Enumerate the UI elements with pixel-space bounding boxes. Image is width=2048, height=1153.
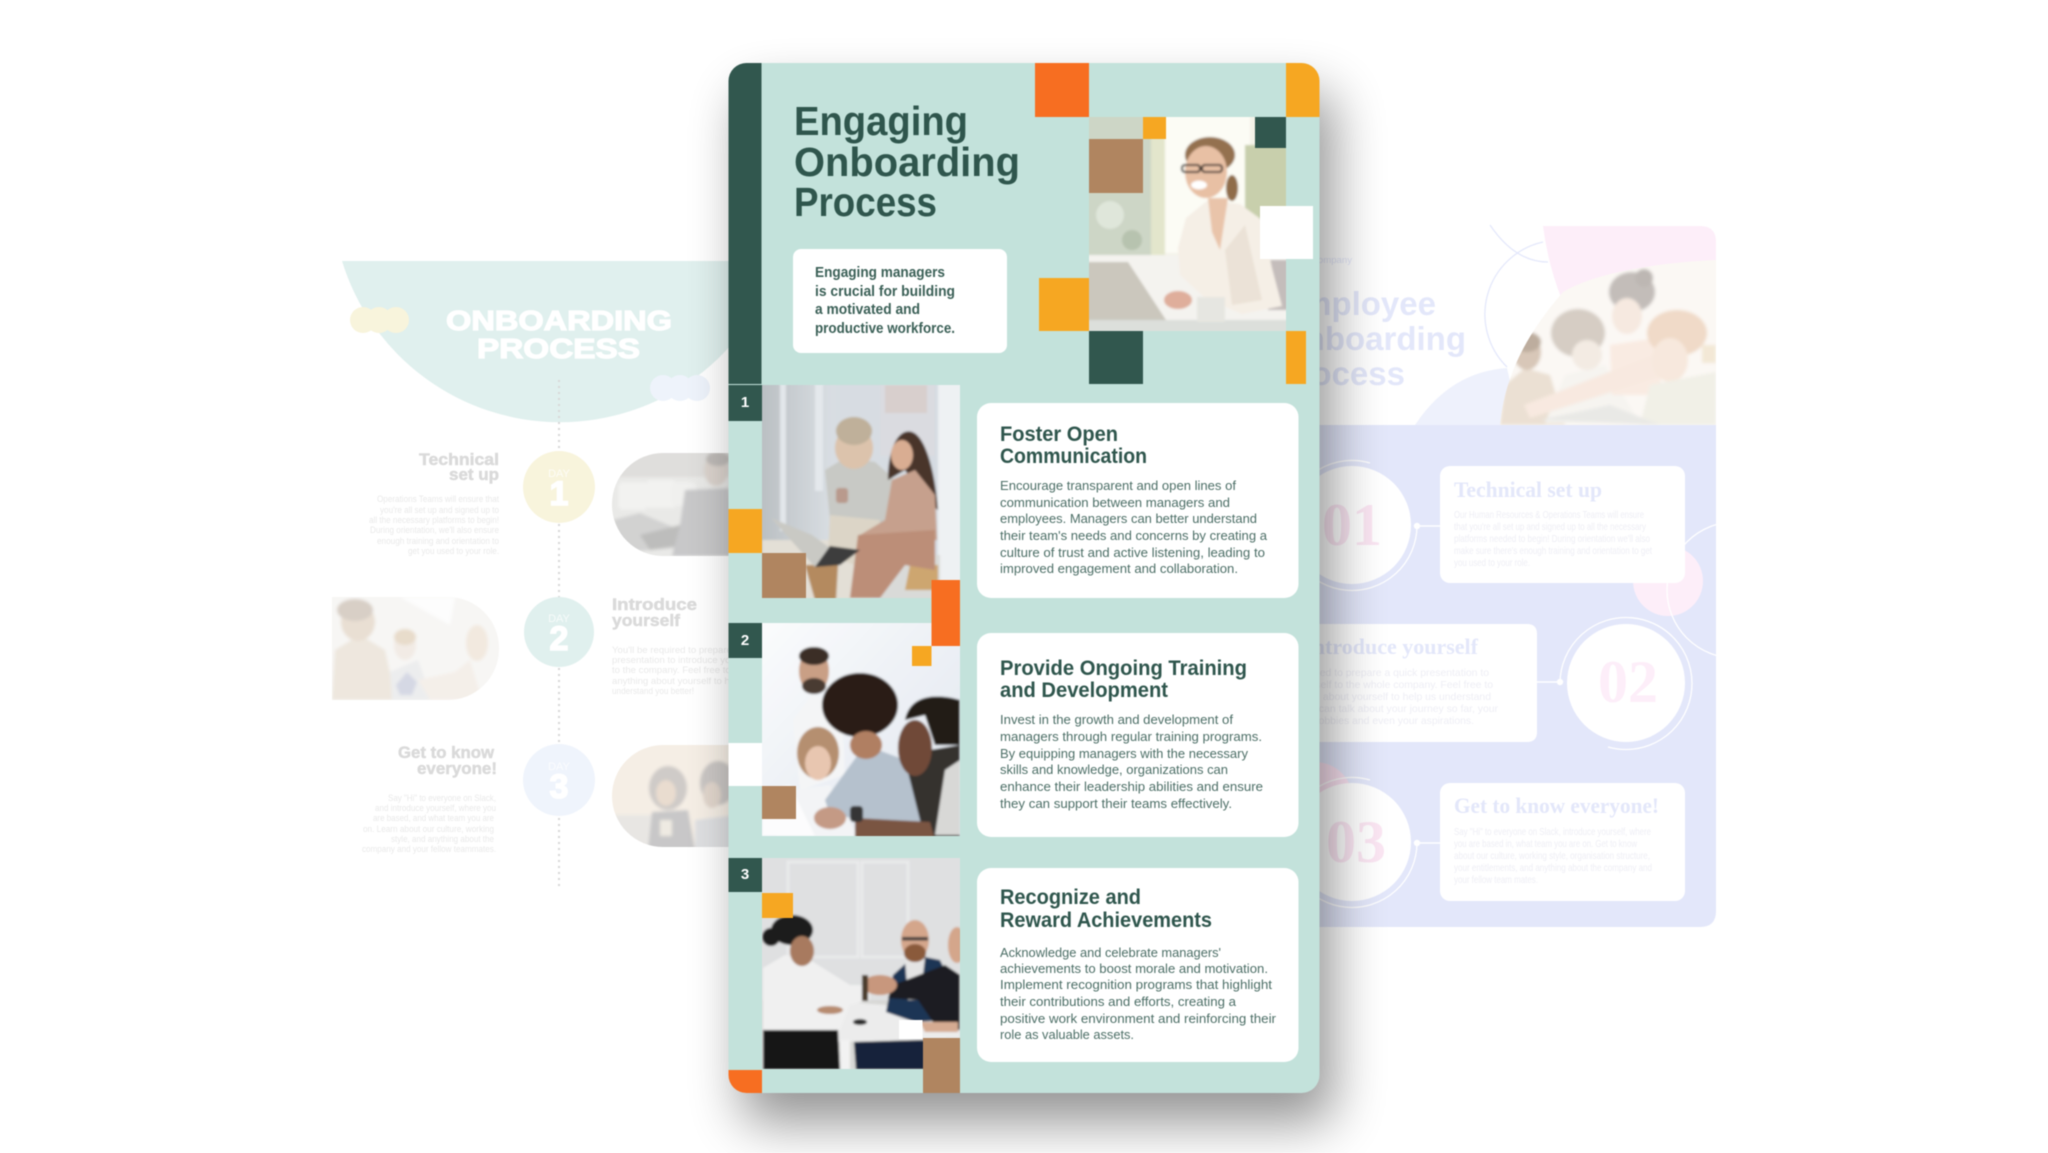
number badge 3: 3 xyxy=(741,866,749,883)
body 1: improved engagement and collaboration. xyxy=(1000,561,1238,576)
step 2 text: to the company. Feel free to tell us xyxy=(612,665,759,676)
card 02: Introduce yourself xyxy=(1304,634,1479,659)
pink circle accent xyxy=(1633,546,1703,616)
card 02: introduce yourself to the whole company. Feel free to xyxy=(1249,680,1493,691)
step 1 text: set up xyxy=(449,466,499,484)
content card 2 xyxy=(977,633,1298,837)
step 3 text: and introduce yourself, where you xyxy=(375,803,496,814)
body 2: they can support their teams effectively. xyxy=(1000,796,1232,811)
step 2 text xyxy=(612,596,765,697)
body 2: skills and knowledge, organizations can xyxy=(1000,762,1228,777)
step 3 text: Get to know xyxy=(398,744,494,762)
card 01: Our Human Resources & Operations Teams will ensure xyxy=(1454,510,1644,521)
photo: colleagues around a computer xyxy=(758,619,964,840)
step 1 text: During orientation, we'll also ensure xyxy=(370,525,499,536)
step 2 text: Introduce xyxy=(612,596,697,614)
step 2 text: understand you better! xyxy=(612,686,694,697)
day 3 badge: DAY xyxy=(548,761,571,773)
body 3: Implement recognition programs that highlight xyxy=(1000,977,1272,992)
circle 03 xyxy=(1293,783,1411,901)
heading 1 xyxy=(1000,426,1147,464)
number badge 3 xyxy=(728,858,762,892)
heading 1: Communication xyxy=(1000,445,1147,468)
card 03: about our culture, working style, organisation structure, xyxy=(1454,851,1650,862)
card 03: Say "Hi" to everyone on Slack, introduce yourself, where xyxy=(1454,827,1651,838)
light lavender hill xyxy=(1415,368,1520,425)
body 1 xyxy=(1000,478,1268,576)
step 01: 01 xyxy=(1322,492,1382,558)
card 01: platforms needed to begin! During orientation we'll also xyxy=(1454,534,1650,545)
photo: man on sofa xyxy=(612,452,729,556)
card 02: tell us anything about yourself to help us understand xyxy=(1251,692,1491,703)
body 1: Encourage transparent and open lines of xyxy=(1000,478,1236,493)
number badge 1: 1 xyxy=(741,394,749,411)
heading 3: Reward Achievements xyxy=(1000,909,1212,932)
card 03: your entitlements, and anything about the company and xyxy=(1454,863,1652,874)
card background xyxy=(728,63,1320,1093)
day 2 badge: 2 xyxy=(550,620,568,658)
day 1 badge xyxy=(523,451,595,523)
body 1: their team's needs and concerns by creating a xyxy=(1000,528,1268,543)
step 01 xyxy=(1287,460,1685,590)
day 3 badge xyxy=(523,744,595,816)
left title: PROCESS xyxy=(477,333,640,364)
card 01: make sure there's enough training and orientation to get xyxy=(1454,546,1652,557)
body 2: enhance their leadership abilities and ensure xyxy=(1000,779,1263,794)
card 03: your fellow team mates. xyxy=(1454,875,1538,886)
day 2 badge xyxy=(524,597,594,667)
body 2: Invest in the growth and development of xyxy=(1000,712,1233,727)
body 2: By equipping managers with the necessary xyxy=(1000,746,1248,761)
day 1 badge: DAY xyxy=(548,468,571,480)
body 1: employees. Managers can better understand xyxy=(1000,511,1257,526)
day 2 badge: DAY xyxy=(548,613,571,625)
lavender panel xyxy=(1280,425,1716,927)
photo: smiling businesswoman xyxy=(1085,113,1290,335)
card 01 xyxy=(1440,466,1685,583)
header semicircle xyxy=(342,261,778,422)
heading 3: Recognize and xyxy=(1000,886,1141,909)
panel: right background infographic xyxy=(1320,224,1716,928)
pink circle accent 2 xyxy=(1277,762,1353,838)
intro callout: Engaging managers xyxy=(815,265,945,281)
left title: ONBOARDING xyxy=(446,305,672,336)
intro callout: is crucial for building xyxy=(815,284,955,300)
heading 1: Foster Open xyxy=(1000,423,1118,446)
step 3 text: company and your fellow teammates. xyxy=(362,844,496,855)
body 2: managers through regular training programs. xyxy=(1000,729,1262,744)
body 3: positive work environment and reinforcing their xyxy=(1000,1011,1277,1026)
infographic canvas xyxy=(332,58,1716,1152)
card 02: experiences, hobbies and even your aspirations. xyxy=(1251,716,1474,727)
right title: Employee xyxy=(1280,285,1436,322)
title: Engaging xyxy=(794,98,968,144)
decorative rings xyxy=(1485,225,1548,367)
step 3 text: Say "Hi" to everyone on Slack, xyxy=(388,793,496,804)
body 3: their contributions and efforts, creating a xyxy=(1000,994,1237,1009)
step 1 text: you're all set up and signed up to xyxy=(380,505,499,516)
step 03 xyxy=(1287,777,1685,907)
accent blocks: item 2 xyxy=(728,580,960,819)
heading 2: and Development xyxy=(1000,679,1168,702)
card 03: Get to know everyone! xyxy=(1454,793,1659,818)
step 1 text: all the necessary platforms to begin! xyxy=(369,515,499,526)
ring 02 xyxy=(1560,618,1692,750)
card 01: you used to your role. xyxy=(1454,558,1530,569)
number badge 2 xyxy=(728,623,762,658)
photo: business handshake at table xyxy=(758,854,966,1073)
right title: Onboarding xyxy=(1279,320,1466,357)
card 02 xyxy=(1247,624,1537,742)
body 3: achievements to boost morale and motivation. xyxy=(1000,961,1268,976)
company label: Company xyxy=(1311,255,1352,266)
card 03: you are based in, what team you are on. Get to know xyxy=(1454,839,1637,850)
step 1 text: Technical xyxy=(419,451,499,469)
panel: main onboarding card xyxy=(728,63,1320,1093)
left dark bar xyxy=(728,63,762,384)
content card 1 xyxy=(977,403,1298,598)
step 3 text: on. Learn about our culture, working xyxy=(363,824,494,835)
pink corner shape xyxy=(1543,226,1716,300)
card 03 xyxy=(1440,783,1685,901)
step 3 text xyxy=(362,744,497,855)
step 02: 02 xyxy=(1598,649,1658,715)
photo: handshake group xyxy=(332,597,498,700)
step 3 text: are based, and what team you are xyxy=(373,813,494,824)
accent blocks: item 1 xyxy=(728,509,806,598)
heading 2 xyxy=(1000,657,1247,702)
ring 03 xyxy=(1287,777,1417,907)
card 01: that you're all set up and signed up to all the necessary xyxy=(1454,522,1647,533)
title: Process xyxy=(794,179,937,225)
left title xyxy=(446,305,672,364)
body 1: culture of trust and active listening, leading to xyxy=(1000,545,1265,560)
dots: yellow xyxy=(350,307,409,333)
intro callout: a motivated and xyxy=(815,302,920,318)
photo: smiling women xyxy=(612,744,729,848)
intro callout xyxy=(793,249,1007,353)
body 2 xyxy=(1000,712,1263,811)
step 2 text: You'll be required to prepare a quick xyxy=(612,645,765,656)
heading 3 xyxy=(1000,888,1212,928)
card 02: you better! You can talk about your journey so far, your xyxy=(1247,704,1499,715)
number badge 2: 2 xyxy=(741,632,749,649)
step 2 text: yourself xyxy=(612,612,681,630)
title xyxy=(794,104,1018,218)
right title: Process xyxy=(1277,355,1405,392)
panel: left background infographic xyxy=(332,260,729,886)
step 02 xyxy=(1247,618,1692,750)
body 3: role as valuable assets. xyxy=(1000,1027,1134,1042)
accent blocks: header xyxy=(1035,63,1320,384)
accent blocks: item 3 xyxy=(728,893,960,1093)
body 3 xyxy=(1000,945,1277,1042)
content card 3 xyxy=(977,868,1298,1062)
step 2 text: anything about yourself to help us xyxy=(612,676,756,687)
intro callout: productive workforce. xyxy=(815,321,955,337)
card 01: Technical set up xyxy=(1454,477,1602,502)
ring 01 xyxy=(1287,460,1417,590)
body 1: communication between managers and xyxy=(1000,495,1230,510)
day 1 badge: 1 xyxy=(550,475,568,513)
step 3 text: style, and anything about the xyxy=(391,834,494,845)
photo: team around laptop xyxy=(1500,260,1716,426)
number badge 1 xyxy=(728,385,762,421)
circle 01 xyxy=(1293,466,1411,584)
step 1 text: get you used to your role. xyxy=(408,546,499,557)
step 1 text: Operations Teams will ensure that xyxy=(377,494,499,505)
card 02: You'll be required to prepare a quick presentation to xyxy=(1252,668,1489,679)
dots: blue xyxy=(650,375,710,401)
heading 2: Provide Ongoing Training xyxy=(1000,657,1247,680)
body 3: Acknowledge and celebrate managers' xyxy=(1000,945,1221,960)
right title xyxy=(1277,285,1466,392)
day 3 badge: 3 xyxy=(550,768,568,806)
step 2 text: presentation to introduce yourself xyxy=(612,655,754,666)
title: Onboarding xyxy=(794,139,1020,185)
step 1 text: enough training and orientation to xyxy=(377,536,499,547)
step 1 text xyxy=(369,451,499,557)
step 3 text: everyone! xyxy=(417,760,497,778)
circle 02 xyxy=(1567,624,1685,742)
step 03: 03 xyxy=(1326,809,1386,875)
photo: two women at a laptop xyxy=(758,381,964,602)
